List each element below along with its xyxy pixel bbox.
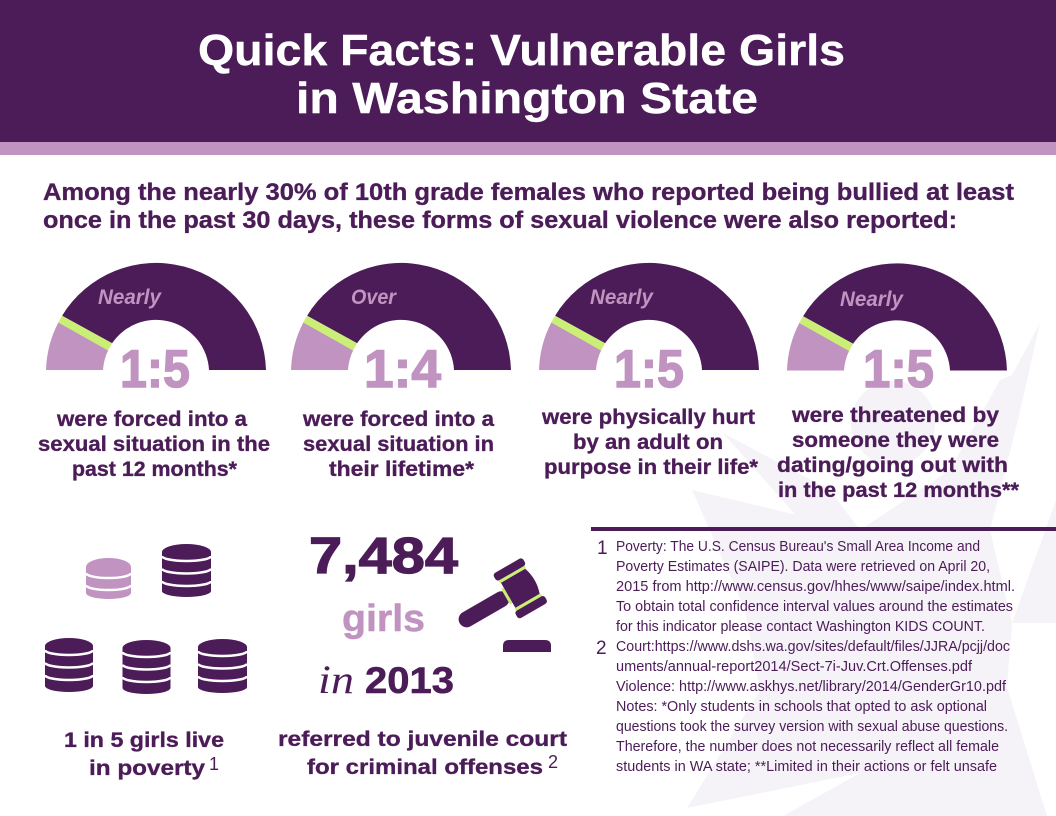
statistic: 7,484 girls in 2013: 2013 bbox=[365, 660, 454, 701]
caption 1: were forced into a bbox=[56, 407, 248, 431]
source notes: To obtain total confidence interval values around the estimates bbox=[616, 599, 1013, 615]
caption 4 bbox=[777, 403, 1020, 502]
caption 2 bbox=[302, 407, 495, 481]
source notes: 2015 from http://www.census.gov/hhes/www/saipe/index.html. bbox=[616, 579, 1015, 595]
statistic: 7,484 girls in 2013: girls bbox=[342, 598, 425, 640]
gauge 1: nearly 1:5 forced in past 12 months: 1:5 bbox=[120, 340, 190, 399]
gauge 1: nearly 1:5 forced in past 12 months: Nearly bbox=[98, 286, 162, 309]
statistic: 7,484 girls in 2013: in bbox=[318, 657, 354, 702]
dark coin stack bottom middle bbox=[122, 640, 170, 694]
source notes: Poverty Estimates (SAIPE). Data were retrieved on April 20, bbox=[616, 559, 990, 575]
source notes: students in WA state; **Limited in their actions or felt unsafe bbox=[616, 759, 997, 775]
caption 4: dating/going out with bbox=[777, 453, 1008, 477]
gauge 4: nearly 1:5 threatened bbox=[787, 263, 1007, 399]
gauge 3: nearly 1:5 physically hurt: Nearly bbox=[590, 286, 654, 309]
source notes: Therefore, the number does not necessarily reflect all female bbox=[616, 739, 999, 755]
caption 2: sexual situation in bbox=[303, 432, 494, 456]
gauge 4: nearly 1:5 threatened: Nearly bbox=[840, 288, 904, 311]
header banner bbox=[0, 0, 1056, 155]
statistic: 7,484 girls in 2013 bbox=[309, 527, 459, 702]
gauge 2: over 1:4 forced in lifetime bbox=[291, 263, 511, 399]
statistic: 7,484 girls in 2013: 7,484 bbox=[309, 527, 459, 584]
intro heading bbox=[43, 179, 1014, 234]
source notes: uments/annual-report2014/Sect-7i-Juv.Crt.Offenses.pdf bbox=[616, 659, 973, 675]
background watermark figure bbox=[687, 323, 1056, 816]
light coin stack bbox=[86, 558, 131, 599]
title bbox=[198, 26, 845, 123]
caption 3 bbox=[541, 405, 759, 479]
court caption bbox=[278, 727, 567, 779]
caption 4: someone they were bbox=[792, 428, 999, 452]
source notes: Notes: *Only students in schools that opted to ask optional bbox=[616, 699, 987, 715]
caption 3: purpose in their life* bbox=[544, 455, 759, 479]
poverty caption: 1 in 5 girls live bbox=[64, 728, 224, 752]
icon: gavel bbox=[447, 557, 551, 652]
gauge 2: over 1:4 forced in lifetime: Over bbox=[351, 286, 398, 309]
caption 2: were forced into a bbox=[302, 407, 495, 431]
dark coin stack bottom right bbox=[198, 639, 247, 693]
source notes: 2 bbox=[596, 638, 607, 659]
source notes bbox=[596, 538, 1015, 775]
intro heading: Among the nearly 30% of 10th grade females who reported being bullied at least bbox=[43, 179, 1014, 206]
gauge 3: nearly 1:5 physically hurt: 1:5 bbox=[614, 340, 684, 399]
icon: coin stacks, 1 in 5 bbox=[45, 544, 247, 694]
source notes: 1 bbox=[597, 538, 608, 559]
gauge 4: nearly 1:5 threatened: 1:5 bbox=[863, 340, 934, 399]
source notes: Court:https://www.dshs.wa.gov/sites/default/files/JJRA/pcjj/doc bbox=[616, 639, 1010, 655]
caption 4: in the past 12 months** bbox=[778, 478, 1020, 502]
gauge 1: nearly 1:5 forced in past 12 months bbox=[46, 263, 266, 399]
caption 1: sexual situation in the bbox=[38, 432, 270, 456]
notes divider bbox=[591, 527, 1056, 531]
dark coin stack bottom left bbox=[45, 638, 93, 692]
caption 3: were physically hurt bbox=[541, 405, 755, 429]
title: Quick Facts: Vulnerable Girls bbox=[198, 26, 845, 75]
source notes: for this indicator please contact Washington KIDS COUNT. bbox=[616, 619, 985, 635]
source notes: Violence: http://www.askhys.net/library/2014/GenderGr10.pdf bbox=[616, 679, 1007, 695]
caption 4: were threatened by bbox=[791, 403, 999, 427]
dark coin stack top row bbox=[162, 544, 211, 597]
poverty caption: in poverty bbox=[89, 756, 205, 780]
poverty caption: 1 bbox=[209, 754, 219, 774]
caption 3: by an adult on bbox=[573, 430, 723, 454]
poverty caption bbox=[64, 728, 224, 780]
caption 1: past 12 months* bbox=[72, 457, 238, 481]
gauge 2: over 1:4 forced in lifetime: 1:4 bbox=[364, 340, 442, 399]
court caption: 2 bbox=[548, 752, 558, 772]
source notes: Poverty: The U.S. Census Bureau's Small Area Income and bbox=[616, 539, 980, 555]
caption 2: their lifetime* bbox=[329, 457, 475, 481]
intro heading: once in the past 30 days, these forms of sexual violence were also reported: bbox=[43, 207, 957, 234]
caption 1 bbox=[38, 407, 270, 481]
court caption: referred to juvenile court bbox=[278, 727, 567, 751]
gauge 3: nearly 1:5 physically hurt bbox=[539, 263, 759, 399]
title: in Washington State bbox=[296, 74, 758, 123]
source notes: questions took the survey version with sexual abuse questions. bbox=[616, 719, 1008, 735]
court caption: for criminal offenses bbox=[307, 755, 543, 779]
